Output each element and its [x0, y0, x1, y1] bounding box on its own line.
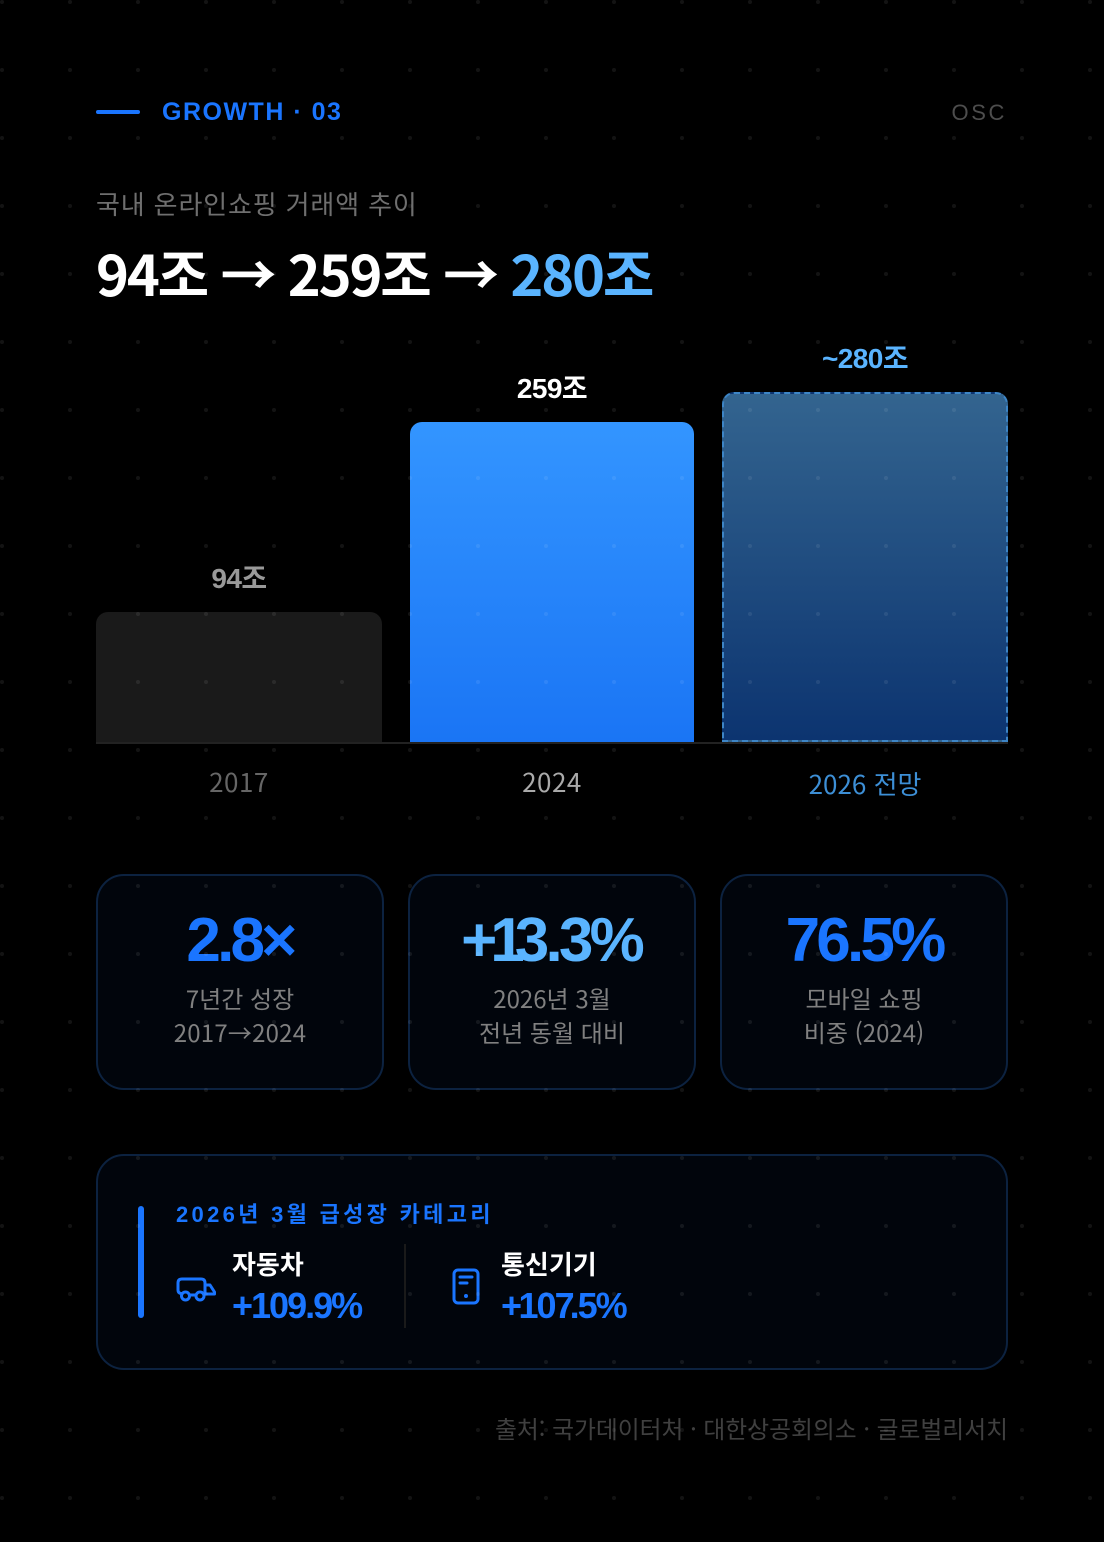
category: telecom devices: 통신기기	[501, 1245, 597, 1282]
stat caption	[479, 980, 625, 1049]
year: 2024: 2024	[522, 763, 582, 800]
panel heading: 2026년 3월 급성장 카테고리	[176, 1202, 494, 1227]
icon: truck	[176, 1278, 216, 1302]
stat caption	[804, 980, 924, 1049]
panel: fast-growing categories	[96, 1154, 1008, 1370]
stat caption: 2017→2024	[174, 1014, 306, 1049]
year: 2017: 2017	[209, 763, 269, 800]
bar: 2024	[410, 422, 694, 742]
bar: 2026 forecast	[722, 392, 1008, 742]
section tag: GROWTH · 03	[162, 98, 342, 126]
accent bar	[138, 1206, 144, 1318]
stat card: growth multiple	[96, 874, 384, 1090]
value: ~280조: ~280조	[822, 343, 908, 374]
header rule	[96, 110, 140, 114]
stat card: yoy growth	[408, 874, 696, 1090]
stat value: 76.5%	[786, 906, 942, 975]
year: 2026 forecast: 2026 전망	[809, 765, 921, 802]
stat caption: 비중 (2024)	[804, 1014, 924, 1049]
value: 94조: 94조	[211, 563, 267, 594]
brand mark: OSC	[952, 100, 1007, 125]
telecom growth value: +107.5%	[501, 1285, 626, 1326]
stat value: 2.8×	[186, 906, 294, 975]
axis baseline	[96, 742, 1008, 744]
value: 259조: 259조	[517, 373, 587, 404]
stat caption: 2026년 3월	[493, 980, 611, 1015]
icon: mobile device	[452, 1268, 480, 1304]
source note: 출처: 국가데이터처 · 대한상공회의소 · 글로벌리서치	[495, 1410, 1008, 1445]
stat value: +13.3%	[461, 906, 641, 975]
bar: 2017	[96, 612, 382, 744]
automotive growth value: +109.9%	[232, 1285, 361, 1326]
bar chart	[96, 343, 1008, 802]
subtitle: 국내 온라인쇼핑 거래액 추이	[96, 185, 418, 222]
title: 94조 → 259조 → 280조	[96, 232, 652, 313]
category: automotive: 자동차	[232, 1245, 304, 1282]
stat caption: 전년 동월 대비	[479, 1014, 625, 1049]
stat caption: 모바일 쇼핑	[805, 980, 923, 1015]
stat card: mobile share	[720, 874, 1008, 1090]
divider	[404, 1244, 406, 1328]
stat caption	[174, 980, 306, 1049]
stat caption: 7년간 성장	[186, 980, 294, 1015]
